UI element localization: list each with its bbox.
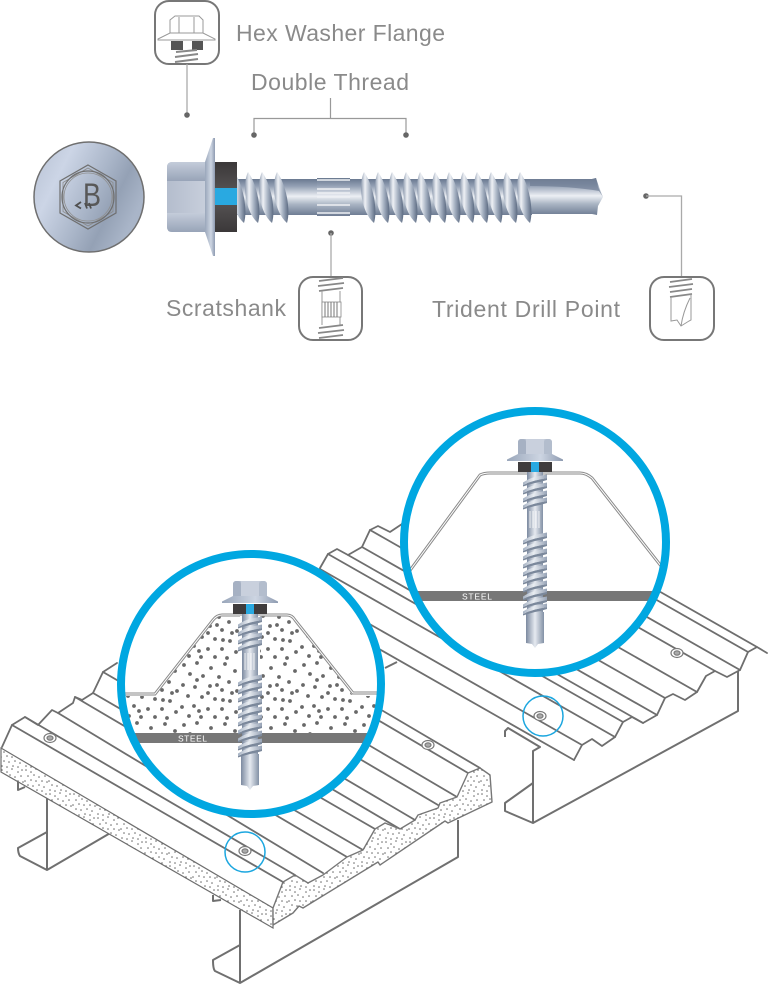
- sheet: [279, 479, 767, 760]
- washer: [215, 162, 237, 232]
- icon: hex washer flange detail: [155, 1, 219, 64]
- icon: scratshank detail: [299, 277, 362, 340]
- screw: [222, 581, 278, 790]
- foam section: [118, 616, 385, 734]
- screw: side view: [167, 138, 603, 256]
- callout: trident drill point label: Trident Drill Point: [432, 296, 621, 322]
- steel beam: STEEL: [178, 734, 207, 744]
- screw marker: [534, 648, 683, 720]
- screw marker: [44, 734, 434, 856]
- leader: hex washer flange: [184, 64, 190, 118]
- roof profile: [118, 615, 385, 694]
- purlin: right: [385, 662, 738, 823]
- hex head: [167, 138, 215, 256]
- foam edge: side: [273, 768, 492, 925]
- magnifier: right circle: [400, 411, 672, 673]
- steel beam: [135, 733, 367, 743]
- steel beam: [418, 591, 652, 601]
- drill point: [530, 178, 603, 215]
- screw: [507, 439, 563, 648]
- leader: double thread bracket: [251, 98, 409, 138]
- double thread crests: [231, 172, 531, 223]
- leader: scratshank: [328, 230, 334, 277]
- callout: hex washer flange label: Hex Washer Flange: [236, 20, 445, 46]
- purlins: left: [18, 782, 458, 983]
- callout: scratshank label: Scratshank: [166, 295, 286, 321]
- icon: screw head top view: B: [83, 177, 101, 213]
- steel beam: STEEL: [462, 592, 492, 602]
- roof profile: [410, 472, 660, 572]
- icon: trident drill point detail: [650, 277, 714, 340]
- marker ring: [523, 696, 563, 736]
- icon: screw head top view: [34, 142, 144, 252]
- leader: trident drill point: [643, 193, 682, 277]
- scratshank knurl: [317, 178, 350, 216]
- sheet: [2, 608, 490, 908]
- illustration: left roof panel with foam: [1, 608, 492, 983]
- callout: double thread label: Double Thread: [251, 69, 409, 95]
- magnifier: left circle: [118, 554, 385, 814]
- illustration: right roof panel without foam: [279, 479, 767, 823]
- marker ring: [225, 832, 265, 872]
- foam edge: front: [1, 748, 273, 928]
